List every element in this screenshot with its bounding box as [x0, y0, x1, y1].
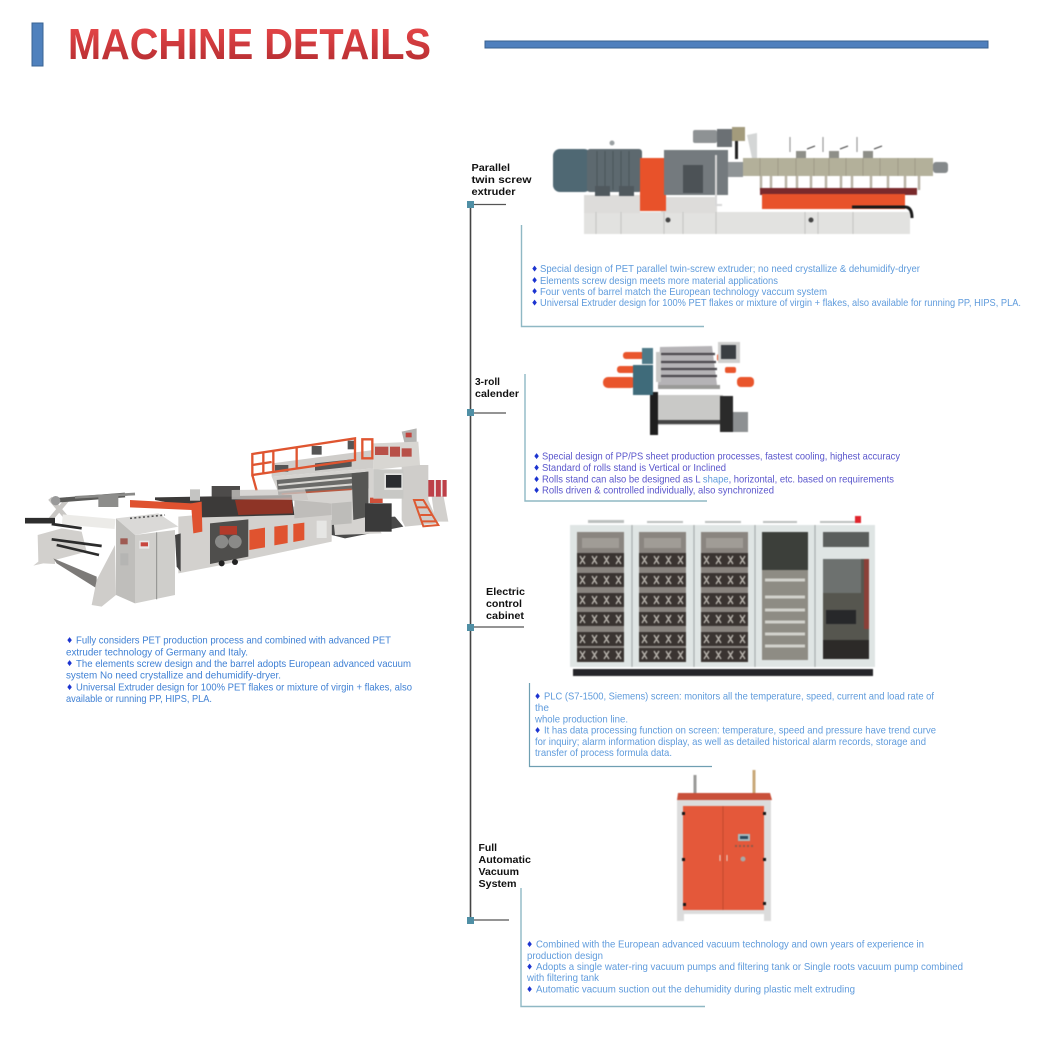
- label: parallel twin screw extruder: [472, 163, 532, 198]
- left description: system No need crystallize and dehumidify-dryer.: [66, 670, 281, 682]
- twin screw extruder machine: [553, 127, 948, 234]
- orange coupling: [640, 158, 666, 211]
- label: 3-roll calender: [475, 377, 519, 400]
- left description: Fully considers PET production process and combined with advanced PET: [76, 634, 392, 646]
- light tower: [752, 770, 756, 793]
- text panel: cabinet: ♦: [534, 692, 541, 701]
- text panel: calender: Rolls driven & controlled individually, also synchronized: [542, 484, 774, 496]
- orange roll ends: [603, 377, 636, 388]
- text panel: calender: ♦: [533, 486, 540, 495]
- vacuum system machine: [677, 770, 772, 922]
- plc panel: [762, 532, 808, 660]
- feeder: [732, 127, 745, 141]
- web path top: [155, 486, 308, 517]
- left description: Universal Extruder design for 100% PET flakes or mixture of virgin + flakes, also: [76, 682, 412, 694]
- text panel: cabinet: ♦: [534, 726, 541, 735]
- left description: The elements screw design and the barrel adopts European advanced vacuum: [76, 658, 411, 670]
- text panel: extruder: Four vents of barrel match the European technology vaccum system: [540, 286, 827, 298]
- text panel: vacuum: with filtering tank: [526, 972, 600, 984]
- heater hangers: [761, 176, 919, 190]
- red railing: [252, 438, 372, 491]
- label: parallel twin screw extruder: extruder: [472, 187, 516, 198]
- text panel: vacuum: Adopts a single water-ring vacuum pumps and filtering tank or Single roots vacuum pump combined: [536, 961, 963, 973]
- unwinder top: [50, 494, 135, 520]
- text panel: vacuum: ♦: [526, 962, 533, 972]
- cable chain: [852, 207, 912, 218]
- unwinder front plate: [92, 545, 116, 607]
- text panel: cabinet: It has data processing function on screen: temperature, speed and pressure have trend curve: [544, 724, 936, 736]
- rear support: [402, 465, 438, 527]
- lower sheet: [53, 558, 97, 588]
- drive unit: [210, 519, 248, 566]
- lower dark section: [332, 517, 403, 538]
- barrel: [743, 158, 933, 176]
- text panel: extruder: Elements screw design meets more material applications: [540, 275, 778, 287]
- unwinder rear plate: [33, 528, 87, 566]
- label: electric control cabinet: cabinet: [486, 611, 525, 622]
- display: [738, 834, 750, 841]
- drive motor: [25, 512, 55, 529]
- text panel: extruder: ♦: [531, 298, 538, 308]
- left description: ♦: [66, 659, 73, 668]
- left description: available or running PP, HIPS, PLA.: [66, 693, 212, 705]
- gearboxes: [633, 365, 653, 395]
- title: MACHINE DETAILS: [68, 20, 431, 69]
- indicator light: [855, 516, 861, 523]
- label: full automatic vacuum system: Full: [478, 843, 497, 854]
- text panel: cabinet: the: [535, 702, 549, 714]
- 3-roll calender machine: [603, 342, 754, 435]
- base: [584, 212, 910, 234]
- motor: [553, 149, 591, 192]
- left description: ♦: [66, 683, 73, 692]
- text panel: calender: Rolls stand can also be designed as L shape, horizontal, etc. based on requirements: [542, 474, 894, 486]
- rods: [52, 524, 102, 555]
- label: full automatic vacuum system: Vacuum: [478, 867, 519, 878]
- rear rack: [407, 480, 448, 522]
- orange doors: [683, 806, 764, 910]
- vents and gauges: [796, 151, 873, 158]
- right panel: [823, 532, 869, 659]
- timeline: [467, 201, 524, 924]
- label: 3-roll calender: 3-roll: [475, 377, 500, 388]
- text panel: vacuum: production design: [527, 950, 603, 962]
- text panel: vacuum: Automatic vacuum suction out the dehumidity during plastic melt extruding: [536, 984, 855, 996]
- text panel: cabinet: [530, 683, 936, 766]
- left description: extruder technology of Germany and Italy.: [66, 646, 248, 658]
- hinges: [682, 812, 766, 906]
- calender frame: [272, 468, 382, 535]
- stairs: [414, 500, 438, 526]
- middle section body: [178, 503, 332, 573]
- upper structure: [373, 442, 420, 470]
- text panel: extruder: Special design of PET parallel twin-screw extruder; no need crystallize & dehumidify-dryer: [540, 263, 920, 275]
- label: parallel twin screw extruder: Parallel: [472, 163, 510, 174]
- text panel: extruder: [522, 225, 1021, 326]
- text panel: extruder: ♦: [531, 264, 538, 274]
- label: electric control cabinet: [486, 587, 525, 622]
- text panel: calender: ♦: [533, 475, 540, 484]
- text panel: calender: Special design of PP/PS sheet production processes, fastest cooling, highest accuracy: [542, 450, 901, 462]
- text panel: cabinet: PLC (S7-1500, Siemens) screen: monitors all the temperature, speed, current and load rate of: [544, 690, 934, 702]
- silver rolls: [658, 346, 717, 385]
- text panel: calender: ♦: [533, 452, 540, 461]
- hopper: [402, 428, 417, 445]
- label: parallel twin screw extruder: twin screw: [472, 175, 532, 186]
- label: full automatic vacuum system: System: [478, 879, 517, 890]
- header accent bar: [32, 23, 43, 66]
- electric control cabinet machine: [570, 516, 875, 676]
- full production line machine: [25, 428, 448, 607]
- text panel: vacuum: [521, 888, 963, 1006]
- orange panels: [249, 528, 265, 550]
- text panel: vacuum: ♦: [526, 940, 533, 949]
- control cabinet: [116, 513, 178, 603]
- left description: ♦: [66, 636, 73, 645]
- right cover: [294, 500, 332, 518]
- gearbox: [664, 150, 728, 195]
- drive banks: [577, 532, 624, 662]
- text panel: calender: Standard of rolls stand is Vertical or Inclined: [542, 462, 726, 474]
- label: 3-roll calender: calender: [475, 389, 519, 400]
- text panel: calender: ♦: [533, 464, 540, 472]
- label: electric control cabinet: Electric: [486, 587, 525, 598]
- touch screen: [718, 342, 740, 363]
- label: full automatic vacuum system: [478, 843, 531, 890]
- text panel: cabinet: whole production line.: [534, 714, 628, 726]
- orange bars: [130, 500, 202, 533]
- text panel: extruder: ♦: [531, 276, 538, 285]
- text panel: cabinet: transfer of process formula data.: [535, 747, 672, 759]
- upper platform: [272, 450, 373, 477]
- roll of sheet: [62, 519, 115, 524]
- text panel: calender: [525, 374, 901, 501]
- label: electric control cabinet: control: [486, 599, 522, 610]
- lower tray: [658, 395, 723, 425]
- text panel: vacuum: ♦: [526, 985, 533, 994]
- text panel: extruder: ♦: [531, 287, 538, 296]
- left description: [66, 634, 412, 705]
- text panel: cabinet: for inquiry; alarm information display, as well as detailed historical alarm records, storage and: [535, 736, 926, 748]
- text panel: vacuum: Combined with the European advanced vacuum technology and own years of experience in: [536, 938, 924, 950]
- label: full automatic vacuum system: Automatic: [478, 855, 531, 866]
- header rule: [485, 41, 988, 48]
- control section and screen: [373, 469, 403, 499]
